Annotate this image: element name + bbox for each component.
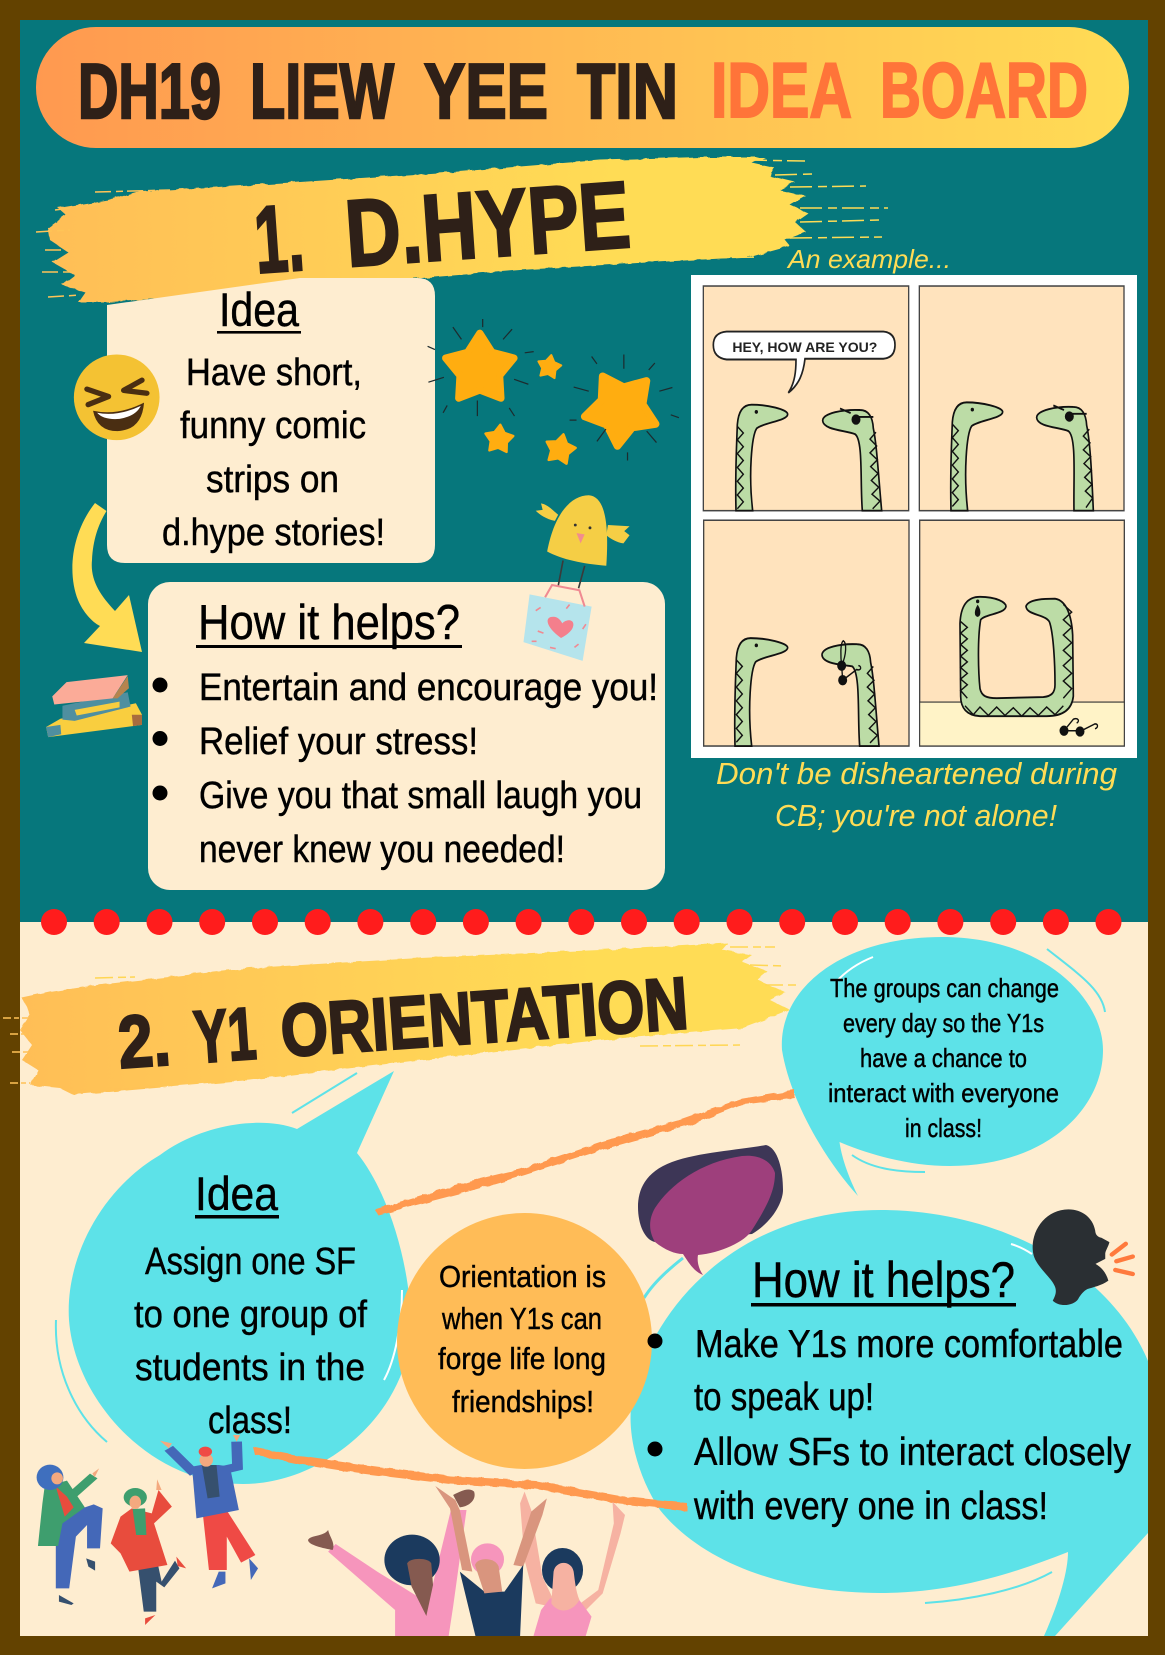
- idea text: Assign one SF: [145, 1241, 356, 1283]
- benefits list: Relief your stress!: [199, 721, 478, 763]
- caption: don't be disheartened: CB; you're not alone!: [775, 798, 1057, 833]
- bubble text: [828, 973, 1059, 1143]
- panel: how it helps speech bubble: [631, 1210, 1148, 1636]
- heading text: 1.: [251, 185, 307, 294]
- panel: idea speech bubble: [56, 1071, 411, 1484]
- title banner: [36, 27, 1129, 148]
- idea text: students in the: [135, 1347, 365, 1389]
- icon: chick holding bag: [523, 495, 630, 661]
- first bullet of how it helps list: [648, 1334, 662, 1348]
- panel: orange circle: [397, 1213, 652, 1469]
- orange stroke lower: [253, 1447, 687, 1511]
- speech bubble: HEY, HOW ARE YOU?: [732, 339, 877, 355]
- how it helps heading: How it helps?: [752, 1252, 1015, 1308]
- woman right: [520, 1492, 625, 1636]
- benefits list: with every one in class!: [693, 1485, 1048, 1528]
- illustration: cheering women: [308, 1486, 625, 1636]
- icon: laughing emoji: [74, 354, 160, 440]
- snakes panel 2: [951, 402, 1093, 511]
- orange stroke upper: [375, 1090, 795, 1215]
- snakes panel 3: [735, 638, 879, 746]
- speech bubble: [713, 332, 895, 393]
- caption: don't be disheartened: [716, 756, 1117, 833]
- person green coat: [37, 1465, 103, 1605]
- icon: shouting head: [1033, 1209, 1133, 1305]
- icon: stars: [428, 319, 679, 465]
- circle text: friendships!: [452, 1384, 594, 1419]
- title name: LIEW: [250, 47, 394, 135]
- benefits list: to speak up!: [694, 1376, 874, 1419]
- title idea board: BOARD: [880, 46, 1088, 134]
- panel: how it helps box: [148, 582, 665, 890]
- bubble text: The groups can change: [830, 973, 1059, 1003]
- person blue jacket: [160, 1435, 258, 1588]
- woman centre: [435, 1486, 547, 1636]
- section 1 heading on brush stroke: [36, 157, 888, 302]
- benefits list: Allow SFs to interact closely: [694, 1431, 1131, 1474]
- heading text: [251, 162, 634, 294]
- bubble text: interact with everyone: [828, 1078, 1059, 1108]
- heading text: Y1: [191, 992, 259, 1079]
- idea text: Have short,: [186, 352, 362, 394]
- idea text: strips on: [206, 459, 339, 501]
- bubble text: every day so the Y1s: [843, 1008, 1044, 1038]
- bubble text: have a chance to: [860, 1043, 1027, 1073]
- title name: [78, 47, 678, 135]
- idea text: [134, 1241, 367, 1442]
- heading text: D.HYPE: [342, 162, 634, 288]
- benefits list: Give you that small laugh you: [199, 775, 642, 817]
- woman left: [308, 1490, 475, 1636]
- icon: purple speech bubble: [638, 1145, 783, 1275]
- benefits list: [648, 1323, 1131, 1528]
- circle text: [438, 1259, 606, 1419]
- bubble text: in class!: [905, 1113, 982, 1143]
- icon: books: [46, 675, 142, 737]
- idea text: funny comic: [180, 405, 366, 447]
- caption: don't be disheartened: Don't be disheartened during: [716, 756, 1117, 791]
- title name: YEE: [424, 47, 548, 135]
- heading text: ORIENTATION: [278, 961, 691, 1073]
- illustration: dancing people: [37, 1435, 258, 1625]
- snakes panel 1: [736, 405, 882, 511]
- panel: top right speech bubble: [782, 937, 1105, 1196]
- idea text: d.hype stories!: [162, 512, 385, 554]
- title idea board: [711, 46, 1088, 134]
- title name: DH19: [78, 47, 221, 135]
- dotted divider: [41, 909, 1122, 935]
- idea text: class!: [208, 1400, 292, 1442]
- heading text: [115, 961, 691, 1084]
- section 2 heading on brush stroke: [3, 943, 800, 1095]
- idea text: [162, 352, 385, 554]
- benefits list: never knew you needed!: [199, 829, 565, 871]
- heading text: 2.: [115, 998, 173, 1084]
- benefits list: [152, 667, 658, 871]
- title idea board: IDEA: [711, 46, 852, 134]
- arrow: [72, 503, 142, 652]
- circle text: when Y1s can: [441, 1301, 602, 1336]
- title name: TIN: [577, 47, 678, 135]
- snake panel 4: [960, 597, 1097, 736]
- idea heading: Idea: [195, 1167, 279, 1220]
- teal background section: [20, 20, 1148, 922]
- cream background section: [20, 922, 1148, 1636]
- caption: an example: An example...: [786, 244, 951, 274]
- circle text: forge life long: [438, 1341, 606, 1376]
- person red coat: [111, 1479, 186, 1625]
- circle text: Orientation is: [439, 1259, 606, 1294]
- idea text: to one group of: [134, 1294, 367, 1336]
- benefits list: Entertain and encourage you!: [199, 667, 658, 709]
- how it helps heading: How it helps?: [198, 596, 460, 650]
- idea heading: Idea: [219, 283, 300, 336]
- panel: idea box: [107, 278, 435, 563]
- comic strip: [691, 275, 1137, 758]
